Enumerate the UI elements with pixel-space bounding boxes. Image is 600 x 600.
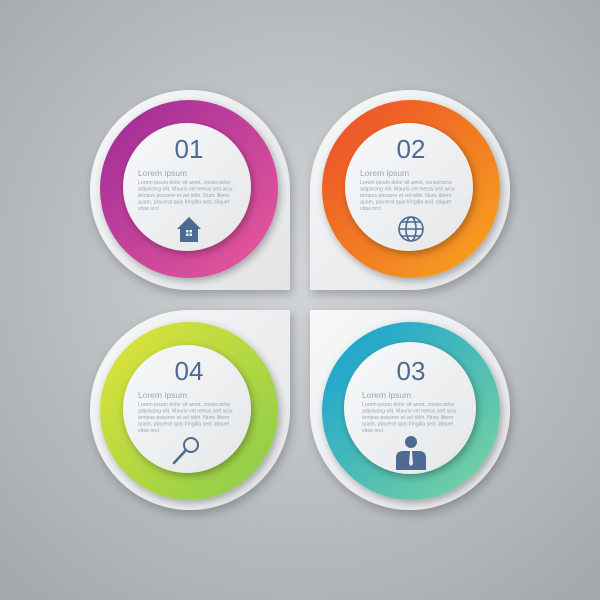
number 02: 02 bbox=[397, 134, 425, 164]
text block 04: vitae orci bbox=[138, 428, 159, 434]
text block 04: Lorem ipsum bbox=[138, 390, 187, 400]
text block 01 bbox=[138, 168, 233, 212]
text block 02: Lorem ipsum bbox=[360, 168, 409, 178]
icon: person bbox=[396, 436, 426, 470]
panel: 03 bbox=[310, 310, 510, 510]
panel: 04 bbox=[90, 310, 290, 510]
text block 03 bbox=[362, 390, 457, 434]
text block 02: vitae orci bbox=[360, 206, 381, 212]
text block 03: quam, placerat quis fringilla sed, aliquet bbox=[362, 422, 454, 428]
text block 02: tempus posuere et vel nibh. Nunc libero bbox=[360, 193, 452, 199]
text block 04: tempus posuere et vel nibh. Nunc libero bbox=[138, 415, 230, 421]
number 04: 04 bbox=[175, 356, 203, 386]
text block 02: adipiscing elit. Mauris vel metus sed arcu bbox=[360, 186, 455, 192]
text block 02: quam, placerat quis fringilla sed, aliquet bbox=[360, 200, 452, 206]
text block 01: vitae orci bbox=[138, 206, 159, 212]
text block 04: quam, placerat quis fringilla sed, aliquet bbox=[138, 422, 230, 428]
text block 03: adipiscing elit. Mauris vel metus sed arcu bbox=[362, 408, 457, 414]
text block 03: vitae orci bbox=[362, 428, 383, 434]
text block 01: adipiscing elit. Mauris vel metus sed arcu bbox=[138, 186, 233, 192]
text block 02: Lorem ipsum dolor sit amet, consectetur bbox=[360, 180, 453, 186]
text block 01: tempus posuere et vel nibh. Nunc libero bbox=[138, 193, 230, 199]
text block 03: tempus posuere et vel nibh. Nunc libero bbox=[362, 415, 454, 421]
text block 04: Lorem ipsum dolor sit amet, consectetur bbox=[138, 402, 231, 408]
icon: house bbox=[177, 217, 201, 242]
icon: magnifier bbox=[174, 438, 198, 463]
text block 03: Lorem ipsum dolor sit amet, consectetur bbox=[362, 402, 455, 408]
text block 04 bbox=[138, 390, 233, 434]
text block 04: adipiscing elit. Mauris vel metus sed arcu bbox=[138, 408, 233, 414]
number 03: 03 bbox=[397, 356, 425, 386]
panel: 01 bbox=[90, 90, 290, 290]
panel: 02 bbox=[310, 90, 510, 290]
icon: globe bbox=[399, 217, 423, 241]
text block 03: Lorem ipsum bbox=[362, 390, 411, 400]
number 01: 01 bbox=[175, 134, 203, 164]
text block 01: Lorem ipsum dolor sit amet, consectetur bbox=[138, 180, 231, 186]
text block 01: Lorem ipsum bbox=[138, 168, 187, 178]
text block 02 bbox=[360, 168, 455, 212]
text block 01: quam, placerat quis fringilla sed, aliquet bbox=[138, 200, 230, 206]
